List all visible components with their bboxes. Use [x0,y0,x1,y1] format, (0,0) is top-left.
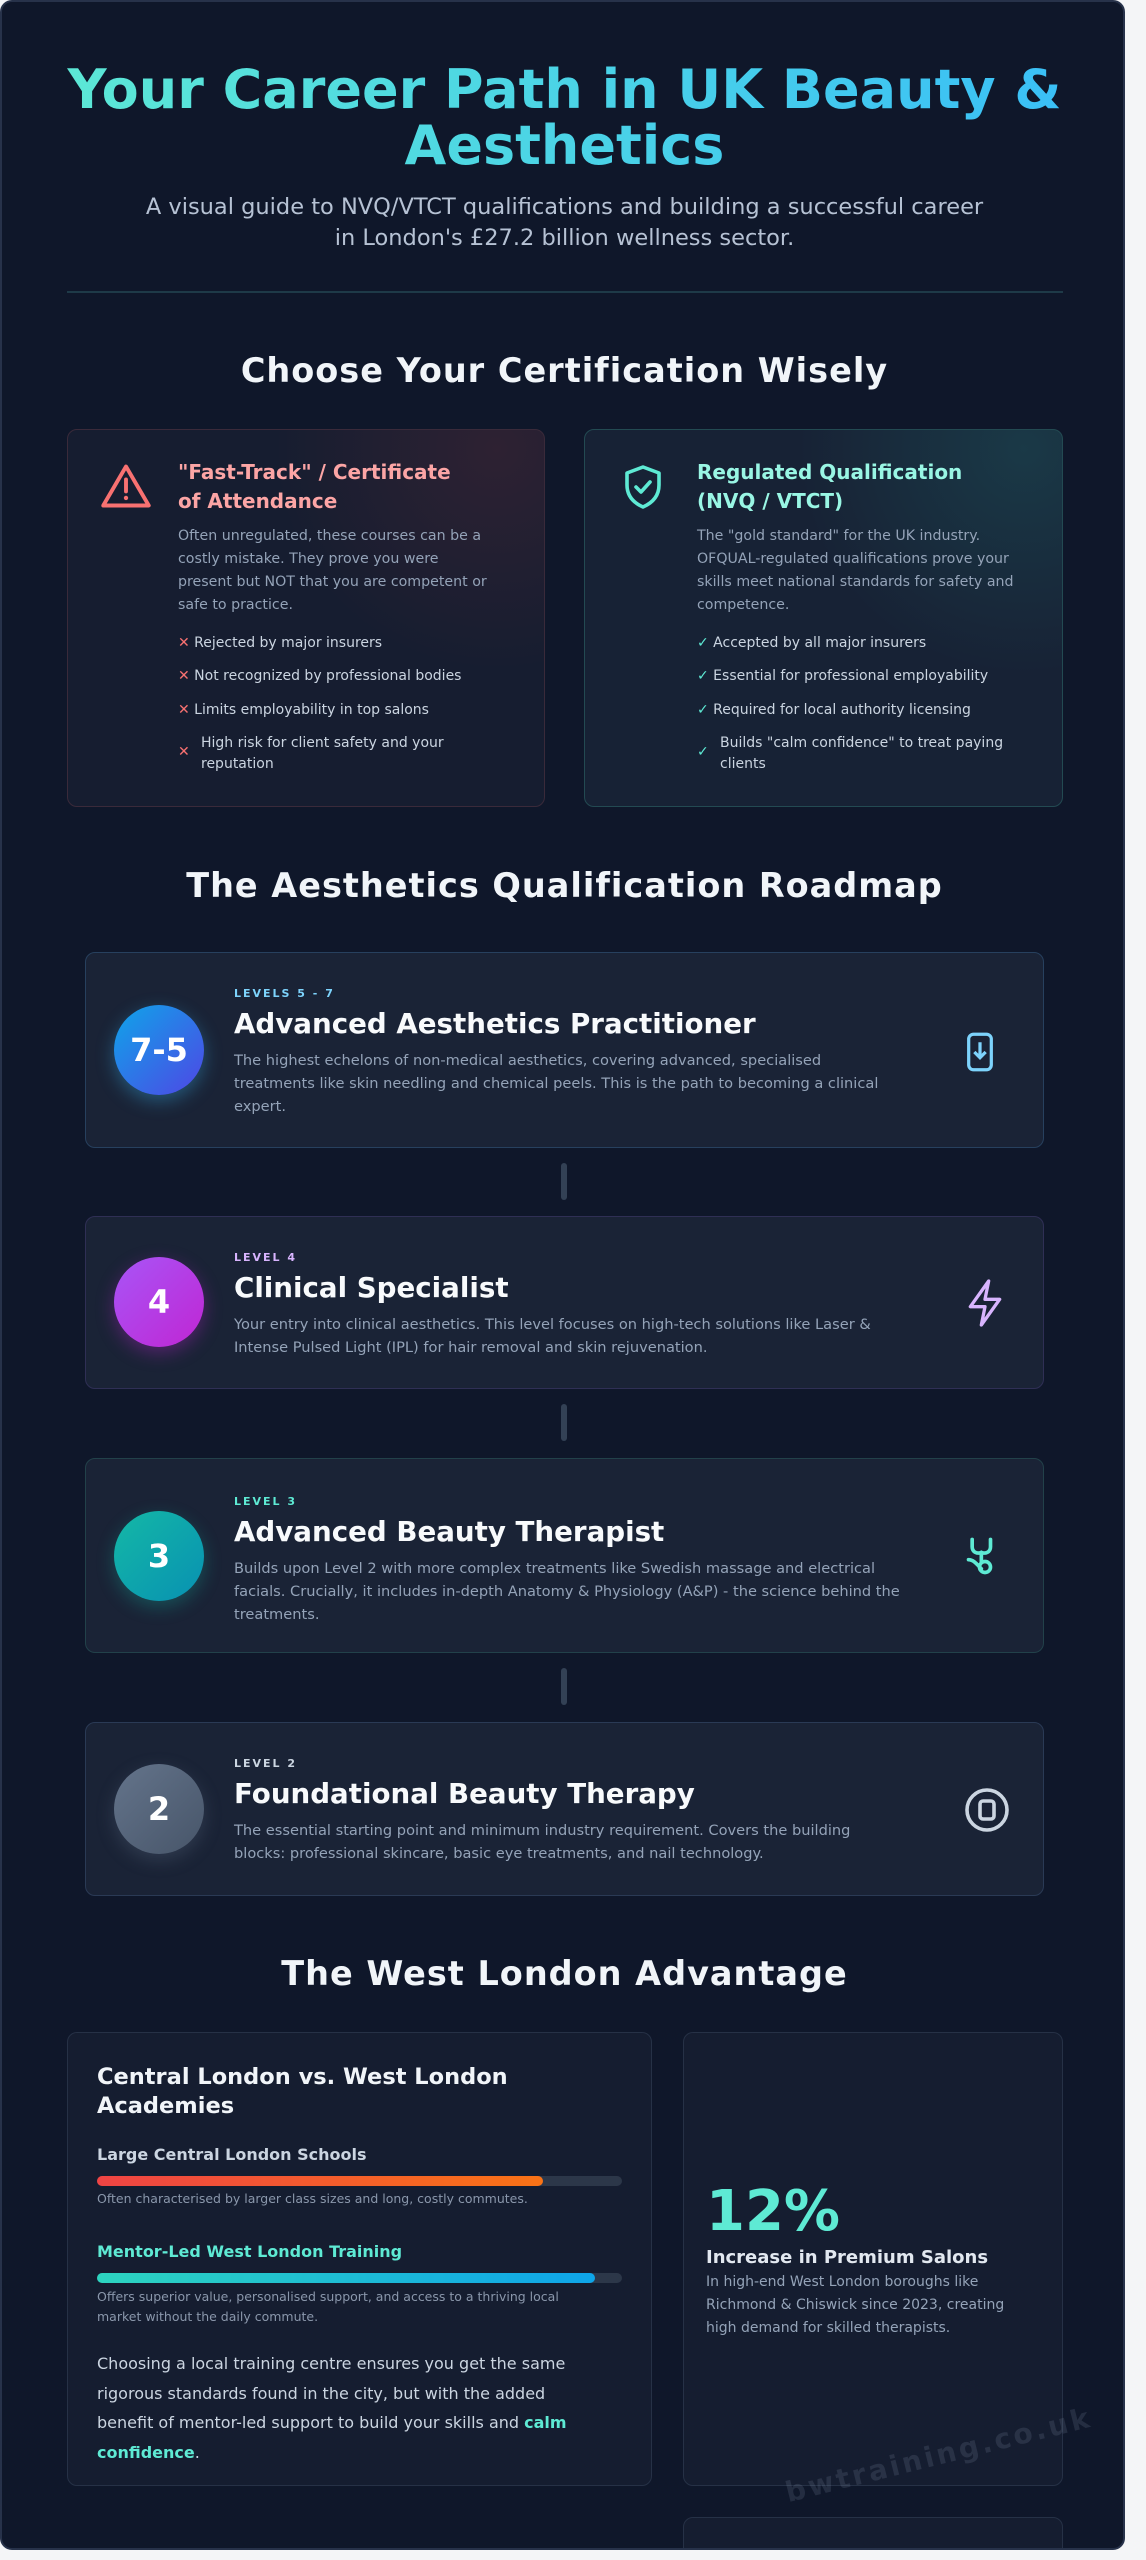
title: Your Career Path in UK Beauty & [68,58,1061,121]
heading: west london: The West London Advantage [281,1954,848,1993]
text block [696,528,1014,613]
bar: west london [97,2242,622,2324]
bar: west london: Offers superior value, personalised support, and access to a thriving local [97,2289,559,2304]
step: level 2: Foundational Beauty Therapy [234,1777,695,1810]
circle: 7-5 [114,1005,204,1095]
heading: regulated [697,460,962,513]
bar: central: Large Central London Schools [97,2145,367,2164]
subtitle [146,194,984,251]
step: levels 5-7: expert. [234,1098,286,1115]
watermark: bwtraining.co.uk [782,2401,1095,2509]
step: level 3: Advanced Beauty Therapist [234,1515,664,1548]
panel: regulated: clients [720,756,766,772]
bar: west london: market without the daily commute. [97,2309,318,2324]
circle: 2: 2 [148,1790,170,1828]
heading: Academies [97,2093,234,2119]
panel: fast-track: ✕ Limits employability in top salons [178,702,429,718]
step: level 3: facials. Crucially, it includes in-depth Anatomy & Physiology (A&P) - the science behind the [234,1583,900,1600]
text block: rigorous standards found in the city, but with the added [97,2384,545,2402]
step: level 2 [85,1722,1044,1896]
heading: fast-track [178,460,451,513]
icon: warning [101,464,151,508]
panel: regulated: ✓ Essential for professional employability [697,668,988,684]
subtitle: in London's £27.2 billion wellness sector. [335,225,794,251]
panel: regulated: ✓ Accepted by all major insurers [697,635,926,651]
heading: Central London vs. West London [97,2064,508,2090]
panel: fast-track: ✕ Rejected by major insurers [178,635,382,651]
icon: lightning [968,1279,1002,1327]
heading [97,2064,508,2119]
step: level 2: LEVEL 2 [234,1757,297,1770]
title: Aesthetics [405,114,724,177]
panel: fast-track [67,429,545,807]
panel: regulated: ✓ Required for local authority licensing [697,702,971,718]
step: level 4: Clinical Specialist [234,1271,509,1304]
panel: partial card [683,2517,1063,2560]
text block: confidence. [97,2442,200,2462]
icon: product [965,1788,1009,1832]
step: levels 5-7: The highest echelons of non-medical aesthetics, covering advanced, specialised [234,1052,821,1069]
step: level 3: LEVEL 3 [234,1495,297,1508]
text block: costly mistake. They prove you were [178,551,438,567]
step: level 4 [85,1216,1044,1389]
panel: regulated: Builds "calm confidence" to treat paying [720,735,1003,751]
step: level 3: Builds upon Level 2 with more complex treatments like Swedish massage and electrical [234,1560,875,1577]
heading: roadmap: The Aesthetics Qualification Roadmap [186,866,943,905]
bar: central [97,2145,622,2206]
subtitle: A visual guide to NVQ/VTCT qualifications and building a successful career [146,194,983,220]
step: level 2: The essential starting point and minimum industry requirement. Covers the building [234,1822,850,1839]
step: level 4: Your entry into clinical aesthetics. This level focuses on high-tech solutions like Laser & [234,1316,871,1333]
text block: safe to practice. [178,597,293,613]
stat number: 12% [706,2179,840,2244]
step: level 3 [85,1458,1044,1653]
stat text: high demand for skilled therapists. [706,2320,950,2336]
heading: choose certification: Choose Your Certification Wisely [241,351,888,390]
title [2,62,1127,174]
panel: stat 12% [683,2032,1063,2486]
heading: regulated: (NVQ / VTCT) [697,489,843,513]
step: level 2: blocks: professional skincare, basic eye treatments, and nail technology. [234,1845,764,1862]
text block [178,528,487,613]
text block: competence. [697,597,789,613]
icon: stethoscope [966,1538,992,1574]
step: level 4: LEVEL 4 [234,1251,297,1264]
circle: 2 [114,1764,204,1854]
heading: regulated: Regulated Qualification [697,460,962,484]
panel: comparison [67,2032,652,2486]
circle: 3 [114,1511,204,1601]
list: pros [697,635,1003,772]
step: levels 5-7 [85,952,1044,1148]
text block: skills meet national standards for safety and [697,574,1014,590]
circle: 4: 4 [148,1283,170,1321]
icon: shield [625,465,661,509]
circle: 3: 3 [148,1537,170,1575]
bar: west london: Mentor-Led West London Training [97,2242,402,2261]
heading: fast-track: "Fast-Track" / Certificate [178,460,451,484]
heading: fast-track: of Attendance [178,489,337,513]
icon: syringe [967,1032,993,1072]
panel: regulated: ✓ [697,744,709,760]
text block: Choosing a local training centre ensures you get the same [97,2354,565,2373]
circle: 4 [114,1257,204,1347]
panel: fast-track: ✕ [178,744,190,760]
panel: regulated [584,429,1063,807]
panel: fast-track: High risk for client safety and your [201,735,444,751]
text block: OFQUAL-regulated qualifications prove your [697,551,1009,567]
stat label: Increase in Premium Salons [706,2247,988,2268]
panel: fast-track: ✕ Not recognized by professional bodies [178,668,461,684]
text block: benefit of mentor-led support to build your skills and calm [97,2413,567,2432]
text block: Often unregulated, these courses can be a [178,528,481,544]
step: levels 5-7: Advanced Aesthetics Practitioner [234,1007,756,1040]
stat text: In high-end West London boroughs like [706,2274,978,2290]
stat text: Richmond & Chiswick since 2023, creating [706,2297,1004,2313]
text block [97,2354,567,2462]
list: cons [178,635,461,772]
bar: central: Often characterised by larger class sizes and long, costly commutes. [97,2191,528,2206]
text block: present but NOT that you are competent or [178,574,487,590]
step: level 4: Intense Pulsed Light (IPL) for hair removal and skin rejuvenation. [234,1339,708,1356]
text block: The "gold standard" for the UK industry. [697,528,980,544]
step: levels 5-7: LEVELS 5 - 7 [234,987,335,1000]
circle: 7-5: 7-5 [130,1031,188,1069]
stat text [706,2274,1004,2336]
step: level 3: treatments. [234,1606,319,1623]
step: levels 5-7: treatments like skin needling and chemical peels. This is the path to becoming a clinical [234,1075,878,1092]
panel: fast-track: reputation [201,756,274,772]
